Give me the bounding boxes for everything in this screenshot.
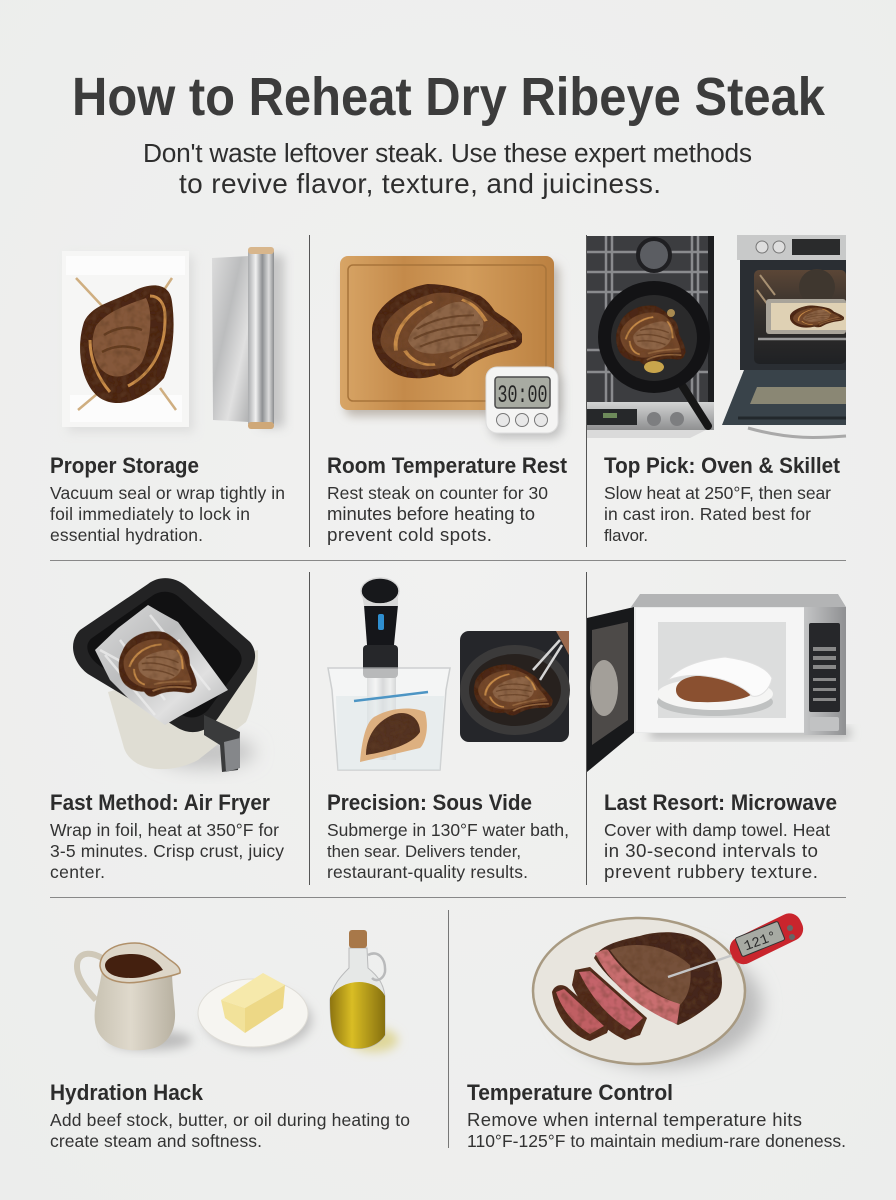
subtitle <box>143 138 752 199</box>
subtitle: Don't waste leftover steak. Use these expert methods <box>143 138 752 168</box>
heading: Room Temperature Rest <box>327 453 568 478</box>
icon: instant-read thermometer <box>668 909 807 977</box>
panel: oven and skillet <box>587 235 846 545</box>
icon: olive oil bottle <box>330 930 398 1052</box>
icon: stovetop skillet <box>587 236 714 438</box>
heading: Hydration Hack <box>50 1080 204 1105</box>
icon: open microwave with steak <box>587 594 850 772</box>
body text <box>467 1109 846 1151</box>
icon: vacuum sealed steak <box>62 251 194 432</box>
body text <box>327 483 548 545</box>
subtitle: to revive flavor, texture, and juiciness. <box>179 168 661 199</box>
title: How to Reheat Dry Ribeye Steak <box>72 67 826 127</box>
body text: Vacuum seal or wrap tightly in <box>50 483 285 503</box>
body text: prevent rubbery texture. <box>604 861 818 882</box>
body text: Slow heat at 250°F, then sear <box>604 483 831 503</box>
body text <box>50 820 284 882</box>
panel: room temperature rest <box>327 256 568 545</box>
body text: foil immediately to lock in <box>50 504 250 524</box>
body text: create steam and softness. <box>50 1131 262 1151</box>
panel: microwave <box>587 594 850 882</box>
heading: Top Pick: Oven & Skillet <box>604 453 841 478</box>
icon: kitchen timer: 30:00 <box>498 381 548 410</box>
body text: Wrap in foil, heat at 350°F for <box>50 820 279 840</box>
body text: in cast iron. Rated best for <box>604 504 811 524</box>
body text: 110°F-125°F to maintain medium-rare doneness. <box>467 1131 846 1151</box>
body text: Cover with damp towel. Heat <box>604 820 830 840</box>
icon: stock pitcher <box>77 943 192 1050</box>
panel: proper storage <box>50 247 285 545</box>
panel: air fryer <box>50 578 284 882</box>
body text: in 30-second intervals to <box>604 840 818 861</box>
icon: kitchen timer <box>486 367 562 438</box>
body text: prevent cold spots. <box>327 524 492 545</box>
icon: immersion circulator in water container <box>328 578 450 770</box>
panel: hydration hack <box>50 930 410 1151</box>
body text: then sear. Delivers tender, <box>327 842 521 861</box>
body text <box>50 483 285 545</box>
body text: Rest steak on counter for 30 <box>327 483 548 503</box>
icon: foil roll <box>212 247 284 429</box>
body text: Submerge in 130°F water bath, <box>327 820 569 840</box>
heading: Last Resort: Microwave <box>604 790 837 815</box>
panel: temperature control <box>467 909 846 1151</box>
body text <box>50 1110 410 1151</box>
icon: cutting board with steak <box>340 256 559 416</box>
body text: essential hydration. <box>50 525 203 545</box>
body text <box>604 483 831 545</box>
panel: sous vide <box>327 578 570 882</box>
heading: Temperature Control <box>467 1080 673 1105</box>
body text: flavor. <box>604 526 648 545</box>
body text: Add beef stock, butter, or oil during heating to <box>50 1110 410 1130</box>
heading: Fast Method: Air Fryer <box>50 790 270 815</box>
body text <box>327 820 569 882</box>
heading: Precision: Sous Vide <box>327 790 532 815</box>
body text: minutes before heating to <box>327 503 535 524</box>
icon: plated sliced steak <box>533 918 762 1067</box>
heading: Proper Storage <box>50 453 199 478</box>
icon: open oven <box>722 235 846 438</box>
body text: center. <box>50 862 105 882</box>
icon: air fryer basket <box>73 578 258 772</box>
body text <box>604 820 830 882</box>
body text: 3-5 minutes. Crisp crust, juicy <box>50 841 284 861</box>
body text: Remove when internal temperature hits <box>467 1109 802 1130</box>
icon: searing photo <box>460 631 570 742</box>
body text: restaurant-quality results. <box>327 862 528 882</box>
icon: instant-read thermometer: 121° <box>742 929 779 955</box>
icon: butter on plate <box>198 973 312 1050</box>
